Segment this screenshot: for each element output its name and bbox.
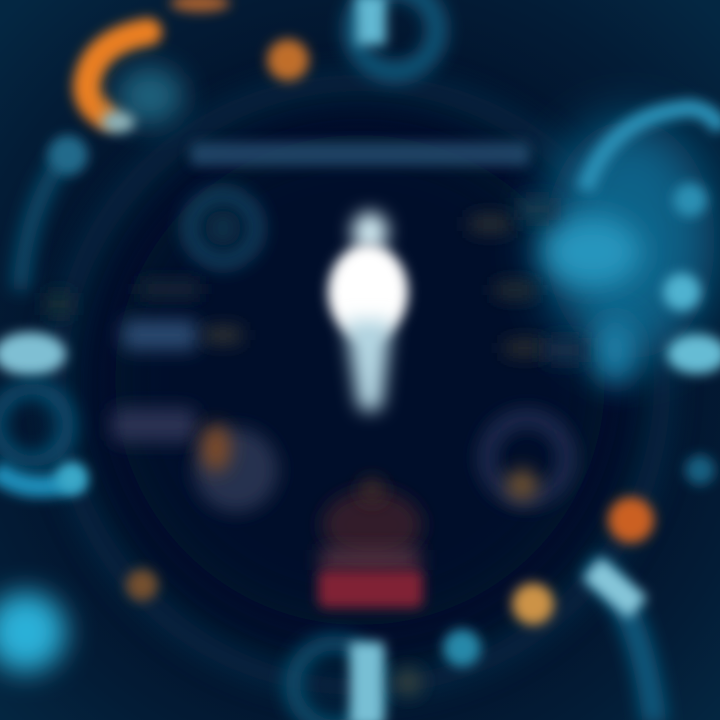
icon: circle upper left — [190, 195, 256, 261]
panel: left blue cloud — [0, 135, 88, 672]
dot: orange lower left — [126, 569, 158, 601]
icon: orange arc top left — [87, 0, 230, 133]
icon: human figure — [328, 212, 408, 412]
icon: lower right circle — [487, 418, 567, 501]
icon: bottom centre ring — [293, 642, 422, 720]
title bar — [190, 142, 530, 166]
icon: bottom red block — [318, 478, 423, 608]
panel: right blue cloud — [542, 108, 720, 485]
dot: orange right — [608, 497, 654, 543]
dot: orange top — [267, 39, 309, 81]
text block: left labels — [48, 282, 241, 442]
outer ring glow — [58, 83, 662, 687]
dot: blue bottom — [443, 629, 481, 667]
text block: right labels — [470, 198, 585, 362]
dot: amber lower right — [512, 583, 554, 625]
arc: lower right — [590, 565, 655, 720]
icon: lower left circle with orange — [194, 424, 278, 512]
icon: top centre ring — [353, 0, 437, 72]
